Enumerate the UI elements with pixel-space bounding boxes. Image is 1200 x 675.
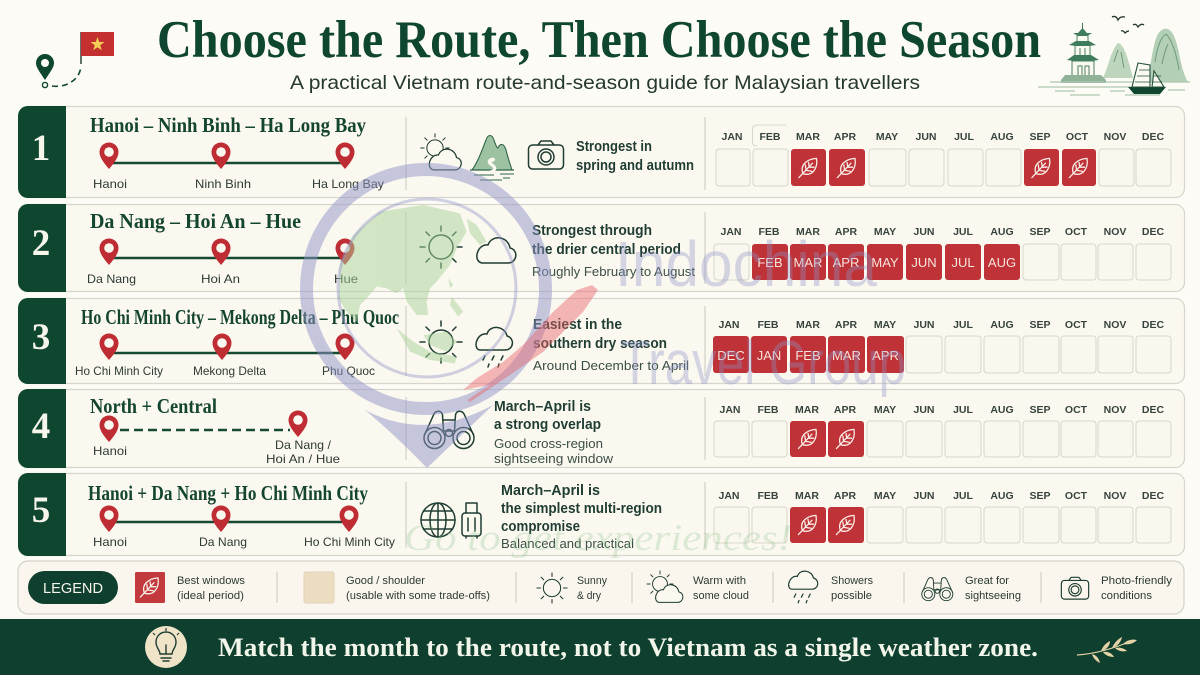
- month calendar 1: OCT: [1066, 131, 1089, 143]
- icons: sun and rain cloud: [420, 321, 512, 367]
- route line 5: Hanoi: [93, 535, 127, 549]
- legend: sightseeing: Great for: [965, 575, 1009, 587]
- strength note 4: March–April is: [494, 399, 591, 415]
- month calendar 3: JUL: [953, 319, 974, 331]
- legend: warm with cloud: some cloud: [693, 590, 749, 602]
- route row 2: [18, 204, 1184, 292]
- watermark outer ring: [306, 170, 546, 408]
- watermark plane: [463, 285, 598, 402]
- month calendar 3: DEC: [717, 348, 745, 363]
- month calendar 2: FEB: [757, 255, 783, 270]
- month calendar 4: JUN: [913, 404, 935, 416]
- month calendar 2: MAR: [794, 255, 822, 270]
- strength note 1: spring and autumn: [576, 158, 694, 174]
- month calendar 2: MAR: [796, 226, 820, 238]
- strength note 2: Strongest through: [532, 223, 652, 239]
- strength note 4: a strong overlap: [494, 417, 601, 433]
- month calendar 1: MAR: [796, 131, 820, 143]
- legend: photo friendly: Photo-friendly: [1101, 575, 1173, 587]
- route line 1: [93, 142, 384, 191]
- strength note 1: [576, 139, 694, 174]
- route title 1: Hanoi – Ninh Binh – Ha Long Bay: [90, 113, 366, 137]
- route line 4: [93, 410, 340, 466]
- month calendar 2: AUG: [988, 255, 1016, 270]
- strength note 2: the drier central period: [532, 242, 681, 258]
- icons: warm cloud, mountain, camera: [421, 134, 564, 180]
- month calendar 4: MAR: [795, 404, 819, 416]
- month calendar 2: NOV: [1104, 226, 1126, 238]
- route line 5: [93, 506, 395, 549]
- legend: good shoulder: (usable with some trade-offs): [346, 590, 490, 602]
- legend: sightseeing: [922, 575, 1021, 602]
- month calendar 3: FEB: [758, 319, 779, 331]
- strength note 4: [494, 399, 614, 466]
- month calendar 4: MAY: [874, 404, 896, 416]
- route line 3: [75, 334, 375, 378]
- month calendar 2: JAN: [720, 226, 742, 238]
- month calendar 2: SEP: [1029, 226, 1051, 238]
- month calendar 2: [714, 226, 1171, 280]
- month calendar 3: MAY: [874, 319, 896, 331]
- month calendar 2: AUG: [990, 226, 1014, 238]
- route line 3: Mekong Delta: [193, 364, 266, 378]
- legend pill: [28, 571, 118, 604]
- strength note 3: southern dry season: [533, 336, 667, 352]
- strength note 5: [501, 483, 662, 551]
- strength note 5: Balanced and practical: [501, 536, 634, 551]
- icons: sun and cloud: [420, 226, 516, 268]
- route row 1: [18, 106, 1184, 198]
- month calendar 4: SEP: [1029, 404, 1051, 416]
- route line 4: Da Nang /: [275, 438, 332, 452]
- month calendar 1: FEB: [760, 131, 781, 143]
- illustration: pagoda, mountains and junk boat: [1038, 16, 1190, 95]
- route line 1: Ninh Binh: [195, 177, 251, 191]
- watermark brand line two: Travel Group: [620, 329, 906, 398]
- month calendar 4: APR: [834, 404, 857, 416]
- legend: good shoulder: [304, 572, 490, 603]
- icon: olive branch: [1077, 637, 1137, 663]
- legend: showers: Showers: [831, 575, 873, 587]
- route line 3: Ho Chi Minh City: [75, 364, 163, 378]
- route row 4: [18, 389, 1184, 468]
- legend: photo friendly: conditions: [1101, 590, 1152, 602]
- number tab 3: 3: [32, 317, 50, 358]
- month calendar 2: OCT: [1065, 226, 1088, 238]
- month calendar 4: DEC: [1142, 404, 1165, 416]
- route title 2: Da Nang – Hoi An – Hue: [90, 209, 301, 233]
- legend: best windows: Best windows: [177, 575, 245, 587]
- legend: good shoulder: Good / shoulder: [346, 575, 425, 587]
- legend: photo friendly: [1061, 575, 1173, 602]
- month calendar 2: JUL: [951, 255, 975, 270]
- strength note 4: sightseeing window: [494, 451, 614, 466]
- route title 5: Hanoi + Da Nang + Ho Chi Minh City: [88, 481, 368, 505]
- month calendar 4: [714, 404, 1171, 457]
- month calendar 4: JUL: [953, 404, 974, 416]
- month calendar 3: AUG: [990, 319, 1014, 331]
- legend: sunny and dry: & dry: [577, 590, 601, 602]
- route line 1: Hanoi: [93, 177, 127, 191]
- month calendar 3: FEB: [795, 348, 821, 363]
- month calendar 1: NOV: [1104, 131, 1126, 143]
- month calendar 3: SEP: [1029, 319, 1051, 331]
- legend: showers: [789, 571, 873, 603]
- legend: showers: possible: [831, 590, 872, 602]
- legend: sightseeing: sightseeing: [965, 590, 1021, 602]
- footer banner: [0, 619, 1200, 675]
- watermark inner ring: [338, 199, 516, 377]
- month calendar 1: [716, 125, 1171, 186]
- month calendar 3: APR: [835, 319, 858, 331]
- legend: warm with cloud: Warm with: [693, 575, 746, 587]
- month calendar 3: JAN: [718, 319, 740, 331]
- month calendar 4: FEB: [758, 404, 779, 416]
- watermark map: [338, 205, 487, 363]
- watermark pin tail: [365, 405, 493, 468]
- month calendar 3: [713, 319, 1171, 373]
- number tab 3: [18, 298, 66, 384]
- month calendar 5: [714, 490, 1171, 543]
- icon: light bulb: [145, 626, 187, 668]
- icon: pin and Vietnam flag: [36, 32, 114, 88]
- month calendar 3: DEC: [1142, 319, 1165, 331]
- month calendar 3: NOV: [1104, 319, 1126, 331]
- month calendar 3: MAR: [832, 348, 861, 363]
- month calendar 4: JAN: [719, 404, 741, 416]
- route line 2: Hue: [334, 272, 358, 286]
- legend: sunny and dry: Sunny: [577, 575, 607, 587]
- route line 5: Da Nang: [199, 535, 247, 549]
- month calendar 2: FEB: [758, 226, 780, 238]
- legend: sunny and dry: [537, 573, 607, 603]
- legend: warm with cloud: [647, 571, 749, 602]
- watermark brand name: Indochina: [615, 228, 877, 300]
- month calendar 5: JAN: [718, 490, 740, 502]
- watermark slogan: Go to get experiences!: [404, 518, 792, 559]
- month calendar 5: DEC: [1142, 490, 1165, 502]
- number tab 4: [18, 389, 66, 468]
- strength note 2: [532, 223, 695, 279]
- month calendar 5: JUN: [913, 490, 935, 502]
- strength note 5: March–April is: [501, 483, 600, 499]
- watermark: Indochina Travel Group logo: [306, 170, 906, 559]
- month calendar 4: AUG: [990, 404, 1014, 416]
- route line 3: Phu Quoc: [322, 364, 375, 378]
- strength note 5: the simplest multi-region: [501, 501, 662, 517]
- month calendar 1: MAY: [876, 131, 898, 143]
- month calendar 5: MAY: [874, 490, 896, 502]
- month calendar 2: MAY: [871, 255, 899, 270]
- strength note 3: Easiest in the: [533, 317, 622, 333]
- month calendar 3: OCT: [1065, 319, 1088, 331]
- month calendar 5: SEP: [1029, 490, 1051, 502]
- route row 3: [18, 298, 1184, 384]
- month calendar 5: OCT: [1065, 490, 1088, 502]
- number tab 4: 4: [32, 406, 50, 447]
- month calendar 5: AUG: [990, 490, 1014, 502]
- route line 5: Ho Chi Minh City: [304, 535, 395, 549]
- month calendar 1: APR: [834, 131, 857, 143]
- month calendar 2: MAY: [874, 226, 896, 238]
- legend: best windows: (ideal period): [177, 590, 244, 602]
- month calendar 5: MAR: [795, 490, 819, 502]
- month calendar 4: NOV: [1104, 404, 1126, 416]
- legend panel: [18, 561, 1184, 614]
- route line 4: Hoi An / Hue: [266, 452, 340, 466]
- month calendar 3: APR: [872, 348, 899, 363]
- month calendar 5: NOV: [1104, 490, 1126, 502]
- number tab 5: 5: [32, 490, 50, 531]
- month calendar 1: JAN: [721, 131, 743, 143]
- strength note 3: Around December to April: [533, 358, 689, 373]
- number tab 2: [18, 204, 66, 292]
- route line 2: [87, 238, 358, 286]
- month calendar 1: DEC: [1142, 131, 1165, 143]
- month calendar 1: JUL: [954, 131, 975, 143]
- legend: best windows: [135, 572, 245, 603]
- route line 4: Hanoi: [93, 444, 127, 458]
- route line 2: Da Nang: [87, 272, 136, 286]
- route line 1: Ha Long Bay: [312, 177, 384, 191]
- strength note 4: Good cross-region: [494, 436, 603, 451]
- month calendar 1: AUG: [990, 131, 1014, 143]
- legend pill: LEGEND: [43, 581, 103, 597]
- number tab 1: [18, 106, 66, 198]
- takeaway message: Match the month to the route, not to Vietnam as a single weather zone.: [218, 633, 1038, 662]
- month calendar 2: APR: [833, 255, 859, 270]
- month calendar 2: DEC: [1142, 226, 1165, 238]
- title: Choose the Route, Then Choose the Season: [157, 11, 1041, 69]
- month calendar 5: FEB: [758, 490, 779, 502]
- route title 3: Ho Chi Minh City – Mekong Delta – Phu Quoc: [81, 305, 399, 329]
- number tab 5: [18, 473, 66, 556]
- icons: globe and suitcase: [421, 503, 481, 538]
- strength note 3: [533, 317, 689, 373]
- month calendar 2: JUL: [953, 226, 974, 238]
- month calendar 2: APR: [835, 226, 858, 238]
- month calendar 1: SEP: [1029, 131, 1051, 143]
- month calendar 5: APR: [834, 490, 857, 502]
- number tab 2: 2: [32, 223, 50, 264]
- icon: binoculars: [424, 411, 474, 448]
- route title 4: North + Central: [90, 394, 217, 418]
- month calendar 3: JAN: [757, 348, 781, 363]
- month calendar 3: MAR: [796, 319, 820, 331]
- month calendar 4: OCT: [1065, 404, 1088, 416]
- number tab 1: 1: [32, 128, 50, 169]
- month calendar 2: JUN: [911, 255, 937, 270]
- month calendar 5: JUL: [953, 490, 974, 502]
- subtitle: A practical Vietnam route-and-season guide for Malaysian travellers: [290, 72, 920, 94]
- route line 2: Hoi An: [201, 272, 240, 286]
- strength note 2: Roughly February to August: [532, 264, 695, 279]
- route row 5: [18, 473, 1184, 556]
- month calendar 3: JUN: [913, 319, 935, 331]
- strength note 5: compromise: [501, 519, 580, 535]
- month calendar 1: JUN: [915, 131, 937, 143]
- strength note 1: Strongest in: [576, 139, 652, 155]
- month calendar 2: JUN: [913, 226, 935, 238]
